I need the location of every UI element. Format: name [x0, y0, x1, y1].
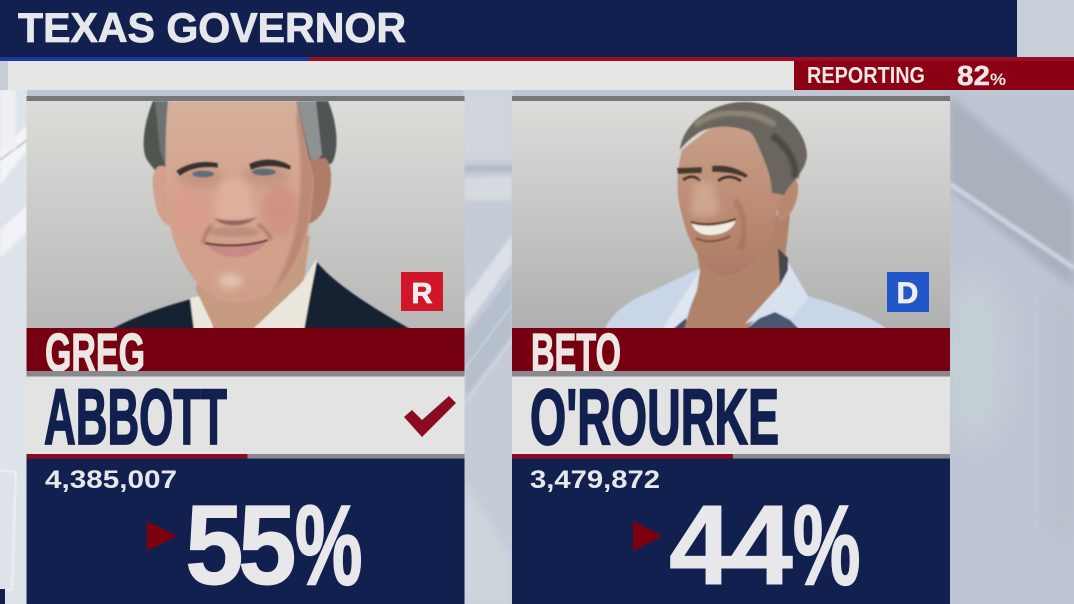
mouth: [205, 240, 268, 257]
undershirt: [665, 318, 688, 330]
results box: [26, 458, 464, 604]
eyes and brows: [178, 168, 226, 188]
face: [678, 120, 782, 275]
neck: [684, 215, 790, 330]
percentage: [185, 483, 362, 604]
party badge: D: D: [897, 277, 918, 310]
nose: [690, 182, 720, 217]
reporting percent: 82%: [957, 60, 1006, 91]
party badge: D: [887, 272, 929, 312]
face: [166, 101, 314, 303]
tricolor stripe: [0, 57, 1074, 61]
percentage: [669, 482, 860, 604]
last name band: ABBOTT: [44, 372, 227, 461]
first name band: [512, 323, 950, 383]
lead arrow: [633, 521, 663, 551]
shading: [735, 200, 745, 250]
vote share bar: [512, 454, 950, 458]
reporting bar: [8, 60, 1074, 91]
lead arrow: [147, 521, 177, 551]
winner check mark: [404, 396, 456, 437]
divider: [26, 371, 464, 376]
last name band: O'ROURKE: [530, 372, 779, 461]
vote count: 4,385,007: [45, 466, 177, 494]
smile: [691, 219, 736, 235]
reporting label: REPORTING: [807, 62, 925, 88]
collars: [663, 270, 700, 330]
shirt: [604, 262, 888, 330]
divider: [512, 371, 950, 376]
portrait: Beto O'Rourke: [512, 101, 950, 330]
collar: [190, 295, 214, 330]
neck: [196, 235, 310, 330]
nasolabial shading: [203, 224, 271, 244]
hair: [144, 101, 176, 185]
title text: TEXAS GOVERNOR: [18, 4, 406, 51]
title banner: [0, 0, 1017, 57]
nose: [214, 178, 256, 224]
vote count: 3,479,872: [530, 466, 660, 494]
ears: [153, 166, 172, 226]
suit: [110, 298, 230, 330]
panel: Greg Abbott: [26, 96, 464, 604]
panel: Beto O'Rourke: [512, 96, 950, 604]
first name band: [26, 323, 464, 383]
eyes and brows: [677, 167, 702, 174]
party badge: R: R: [412, 278, 433, 310]
vote share bar: [26, 454, 464, 458]
portrait: Greg Abbott: [26, 101, 464, 330]
results box: [512, 458, 950, 604]
party badge: R: [401, 272, 443, 311]
hair: [680, 102, 807, 195]
ear: [778, 176, 798, 222]
